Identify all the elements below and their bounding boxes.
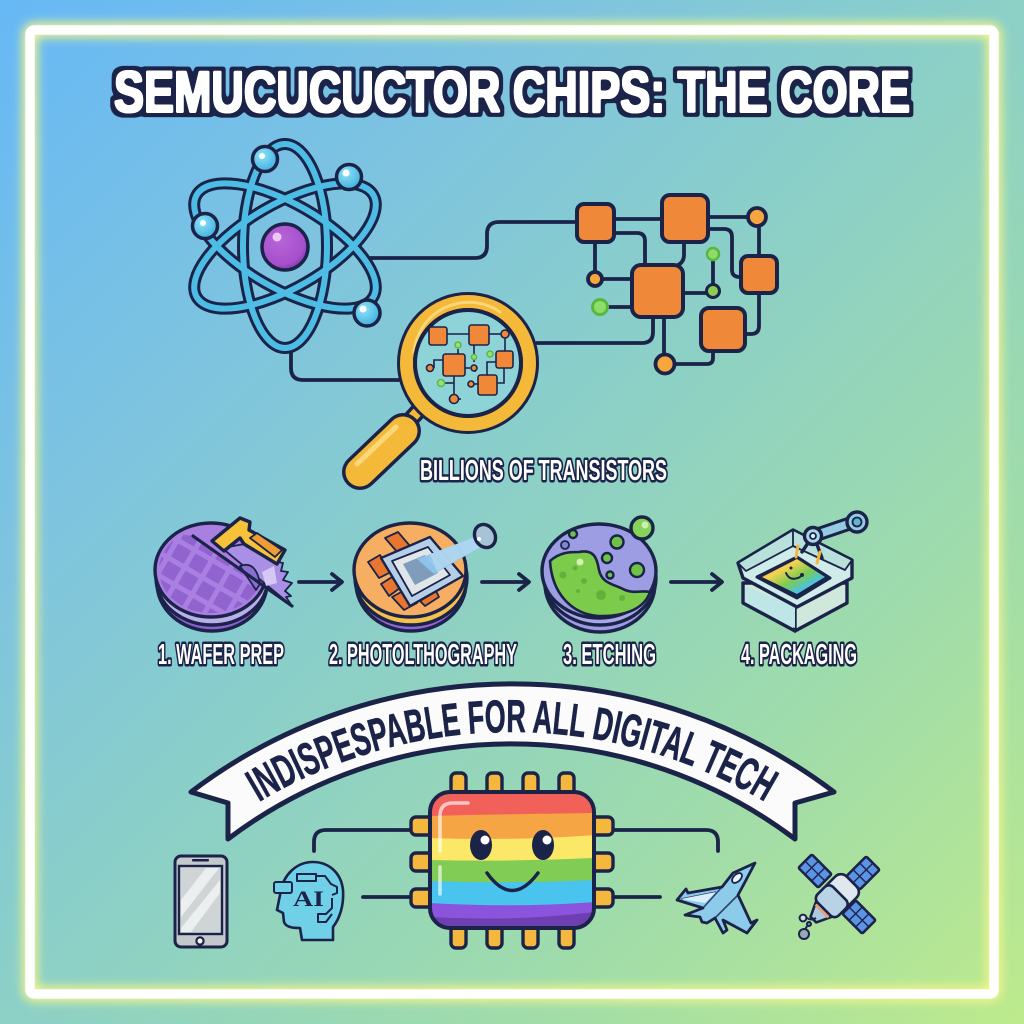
icon: magnifying glass: [357, 302, 530, 472]
face: [470, 830, 492, 860]
antenna parts: [799, 915, 816, 939]
magnified circuit: [426, 325, 513, 404]
banner: indispensable for all digital tech: [188, 681, 836, 842]
arrow: step 3 to 4: [671, 574, 722, 590]
label 1: 1. WAFER PREP: [158, 639, 284, 671]
nucleus: [262, 224, 308, 270]
rainbow body: [429, 791, 595, 931]
nodes: [748, 208, 766, 226]
box lower: [743, 583, 847, 631]
circuit traces: [537, 217, 759, 364]
box back walls: [738, 530, 852, 607]
icon: atom: [176, 144, 394, 348]
pins: [411, 773, 613, 948]
saw blade: [222, 541, 292, 606]
bubbles: [569, 530, 644, 578]
body: [803, 871, 862, 930]
highlight: [440, 803, 468, 851]
light beam: [417, 534, 488, 574]
connector lines: atom to circuit and magnifier: [291, 222, 578, 380]
step 4 icon: packaging: [738, 512, 867, 631]
icon: satellite: [798, 854, 880, 939]
caption: billions of transistors: BILLIONS OF TRANSISTORS: [420, 455, 667, 487]
electrons: [192, 146, 380, 326]
rainbow chip: [757, 557, 830, 598]
icon: smartphone: [175, 856, 227, 947]
arrow: step 2 to 3: [482, 574, 529, 590]
robot arm: [813, 521, 857, 536]
step 2 icon: photolithography: [354, 521, 500, 631]
exposed orange cells: [368, 532, 439, 610]
step 3 icon: etching: [542, 517, 656, 632]
icon: AI head: [274, 862, 343, 940]
banner: indispensable for all digital tech: INDISPESPABLE FOR ALL DIGITAL TECH: [244, 700, 780, 802]
lens and ring: [415, 310, 521, 416]
step 1 icon: wafer prep: [150, 518, 292, 631]
lens: [470, 521, 500, 551]
arrow: step 1 to 2: [299, 574, 342, 590]
circuit diagram: [537, 195, 777, 374]
label 4: 4. PACKAGING: [741, 639, 857, 671]
photomask chip: [381, 537, 463, 606]
icon: rainbow chip mascot: [411, 773, 613, 948]
solar panels: [798, 854, 880, 934]
icon: AI head: AI: [293, 886, 324, 911]
label 2: 2. PHOTOLTHOGRAPHY: [329, 639, 517, 671]
cutting tool: [212, 518, 285, 564]
handle: [410, 408, 421, 420]
green etch blob: [550, 551, 650, 616]
step labels: [158, 639, 857, 671]
chip squares: [577, 204, 614, 242]
icon: jet: [677, 863, 757, 933]
label 3: 3. ETCHING: [563, 639, 656, 671]
chip connector lines: [314, 830, 718, 897]
